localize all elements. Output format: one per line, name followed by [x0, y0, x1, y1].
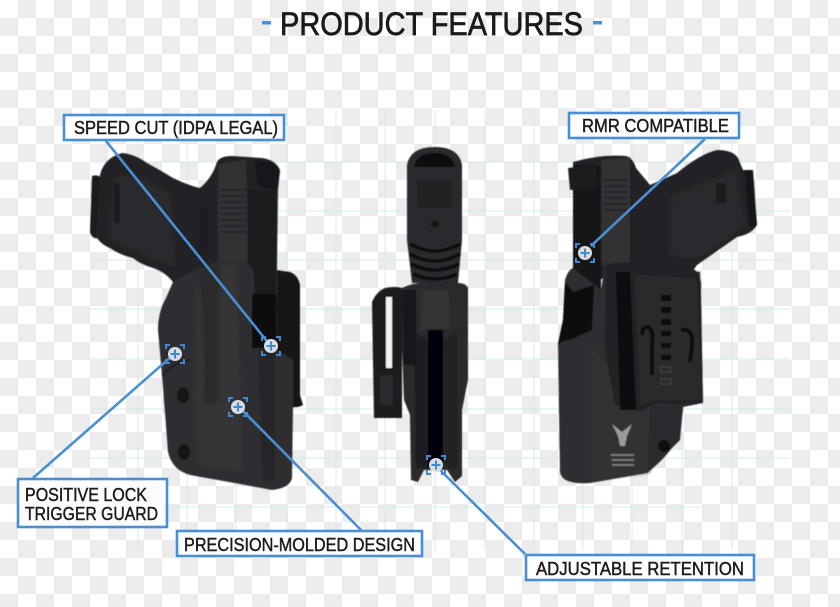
target marker: trigger guard [166, 345, 184, 363]
back clip [275, 270, 303, 407]
brand logo [612, 424, 632, 446]
callout: speed cut: SPEED CUT (IDPA LEGAL) [74, 117, 278, 138]
target marker: speed cut [262, 337, 280, 355]
target marker: precision-molded [229, 398, 247, 416]
callout: positive lock trigger guard [18, 479, 167, 527]
holster: right view [558, 150, 757, 483]
belt clip [605, 263, 703, 412]
pistol grip and slide [90, 153, 280, 345]
callout: positive lock trigger guard: POSITIVE LOCK [25, 485, 147, 505]
callout: adjustable retention: ADJUSTABLE RETENTION [536, 558, 744, 579]
holster: rear view [372, 147, 468, 482]
leader lines [33, 139, 705, 554]
pistol [568, 150, 757, 295]
title: PRODUCT FEATURES [280, 6, 583, 42]
target marker: adjustable retention [427, 456, 445, 474]
holster shell [558, 262, 703, 483]
callout: positive lock trigger guard: TRIGGER GUARD [25, 504, 158, 524]
callout: precision-molded design: PRECISION-MOLDED DESIGN [184, 534, 415, 555]
holster body [158, 262, 293, 490]
target marker: RMR [576, 244, 594, 262]
callout: RMR compatible: RMR COMPATIBLE [582, 115, 729, 136]
holster: left view [90, 153, 303, 490]
